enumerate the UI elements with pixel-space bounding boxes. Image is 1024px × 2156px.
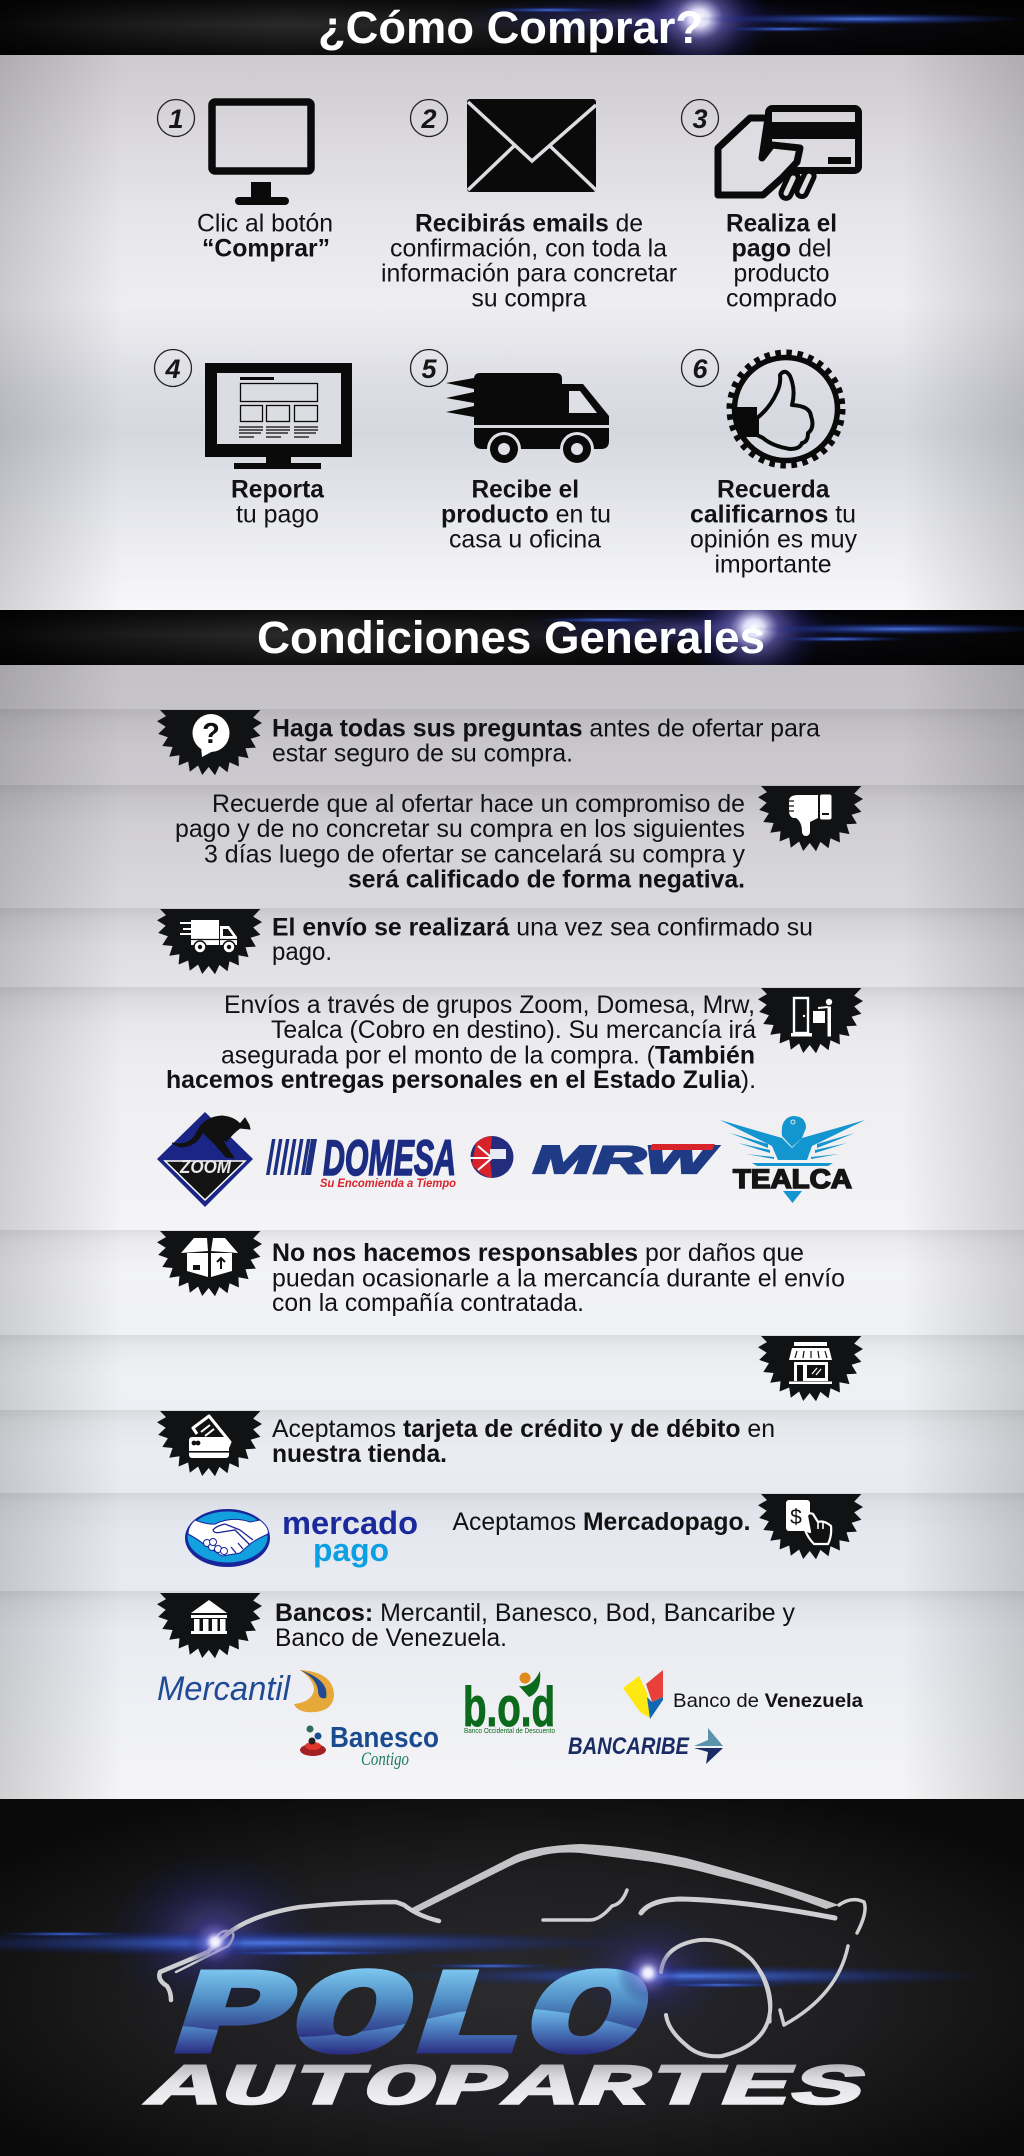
step text 5: producto en tu [441,500,611,528]
text: shipping: El envío se realizará una vez sea confirmado su [272,914,813,942]
text: banks: Bancos: Mercantil, Banesco, Bod, Bancaribe y [275,1599,795,1627]
condition: carriers [166,988,863,1094]
text: carriers: Envíos a través de grupos Zoom, Domesa, Mrw, [224,991,755,1019]
icon: truck badge [157,909,262,974]
condition: not responsible for damage [157,1231,845,1317]
step text 6: importante [714,550,832,578]
condition: credit and debit cards [157,1411,775,1476]
logo: Bancaribe: BANCARIBE [568,1733,690,1760]
step text 5: Recibe el [472,476,579,504]
panel: how to buy background [0,55,1024,610]
title: Condiciones Generales: Condiciones Generales [257,612,765,663]
text: cards accepted: Aceptamos tarjeta de crédito y de débito en [272,1415,775,1443]
icon: envelope [467,99,596,192]
step text 3: Realiza el [726,210,837,238]
header band: ¿Cómo Comprar? [0,0,1024,55]
step text 3: pago del [732,234,832,262]
condition: banks [157,1593,795,1658]
icon: door delivery badge [758,988,863,1053]
logo: Zoom: ZOOM [179,1157,232,1177]
icon: pay tap badge: $ [790,1506,802,1529]
text: shipping: pago. [272,938,332,966]
logo: Domesa [266,1130,456,1190]
icon: pay tap badge [758,1494,863,1559]
step 3: make the payment [682,100,860,312]
step 1: click the buy button [158,100,333,262]
logo: MRW [533,1139,719,1182]
wordmark: POLO: POLO [176,1952,646,2088]
logo: Banco de Venezuela [623,1670,863,1719]
text: carriers: asegurada por el monto de la compra. (También [221,1042,755,1070]
logo: Mercado Pago: pago [313,1532,389,1568]
footer: Polo Autopartes brand panel [0,1799,1024,2156]
wordmark: POLO [174,1968,648,2055]
panel: general conditions background [0,665,1024,1799]
logo: B.O.D: Banco Occidental de Descuento [464,1728,555,1735]
step 2: confirmation emails [381,99,677,312]
text: cards accepted [272,1415,775,1468]
text: damage disclaimer: con la compañía contratada. [272,1289,584,1317]
header band: Condiciones Generales [0,610,1024,665]
logo: Tealca: TEALCA [733,1164,852,1194]
step text 3: producto [734,260,830,288]
icon: box badge [157,1231,262,1296]
flare highlights [185,1912,680,2005]
text: Mercadopago accepted: Aceptamos Mercadopago. [452,1508,750,1536]
number badge 3 [682,100,718,136]
step text 3 [726,210,837,312]
number badge 2: 2 [420,104,437,134]
step text 2: información para concretar [381,260,677,288]
step text 6: opinión es muy [690,526,857,554]
logo: Domesa: Su Encomienda a Tiempo [320,1178,456,1190]
text: banks [275,1599,795,1652]
car outline [159,1844,865,2056]
logo: B.O.D [463,1671,555,1738]
step text 2 [381,210,677,312]
step text 1: Clic al botón [197,210,333,238]
icon: cards badge [157,1411,262,1476]
icon: computer monitor [212,102,311,205]
text: carriers [166,991,756,1094]
icon: thumbs up seal [730,352,842,466]
logo: Domesa: DOMESA [323,1130,456,1186]
logo: Bancaribe [568,1728,723,1764]
text: commitment warning: 3 días luego de ofertar se cancelará su compra y [204,840,745,868]
logo: round carrier seal [470,1136,514,1178]
text: ask questions: estar seguro de su compra. [272,740,573,768]
icon: monitor with web page [205,363,352,469]
step 5: receive the product [410,350,611,554]
logo: Mercado Pago [185,1505,418,1568]
step text 1 [197,210,333,262]
text: banks: Banco de Venezuela. [275,1624,507,1652]
number badge 6: 6 [692,354,708,384]
text: shipping [272,914,813,966]
wordmark: POLO: POLO [176,1952,646,2088]
condition: negative rating warning [175,786,863,894]
text: damage disclaimer: puedan ocasionarle a la mercancía durante el envío [272,1264,845,1292]
lens flares [0,1850,990,2035]
step text 5 [441,476,611,554]
step text 4: Reporta [231,476,325,504]
text: damage disclaimer: No nos hacemos responsables por daños que [272,1239,804,1267]
number badge 3: 3 [692,104,708,134]
text: commitment warning [175,790,745,894]
condition: Mercadopago [185,1494,863,1568]
number badge 1: 1 [168,104,184,134]
step text 1: “Comprar” [202,234,330,262]
step text 6: Recuerda [717,476,831,504]
text: ask questions [272,714,820,768]
text: cards accepted: nuestra tienda. [272,1440,447,1468]
condition: shipping after confirmation [157,909,813,974]
title: ¿Cómo Comprar?: ¿Cómo Comprar? [318,2,703,53]
text: damage disclaimer [272,1239,845,1317]
step text 4 [231,476,325,528]
wordmark: AUTOPARTES: AUTOPARTES [144,2057,864,2122]
icon: question bubble badge: ? [202,718,220,750]
text: carriers: Tealca (Cobro en destino). Su mercancía irá [271,1016,756,1044]
step text 4: tu pago [236,500,319,528]
step text 3: comprado [726,284,837,312]
step text 2: confirmación, con toda la [390,234,667,262]
number badge 1 [158,100,194,136]
number badge 5: 5 [421,354,437,384]
number badge 4 [154,350,192,386]
step text 6 [690,476,857,578]
step text 2: Recibirás emails de [415,210,643,238]
logo: B.O.D: b.o.d [463,1675,555,1738]
logo: Banesco: Banesco [330,1722,439,1754]
number badge 6 [682,350,718,386]
icon: question bubble badge [157,710,262,775]
step text 6: calificarnos tu [690,500,856,528]
step text 5: casa u oficina [449,526,601,554]
stripes [266,1139,317,1175]
icon: thumbs down badge [758,786,863,851]
text: commitment warning: pago y de no concretar su compra en los siguientes [175,815,745,843]
number badge 2 [410,100,448,136]
logo: Banesco: Contigo [361,1749,409,1770]
icon: hand holding card [718,108,860,200]
step 4: report your payment [154,350,352,528]
condition: ask questions [157,710,820,775]
logo: Mercantil: Mercantil [157,1670,291,1708]
step 6: rate us [682,350,857,578]
text: ask questions: Haga todas sus preguntas antes de ofertar para [272,714,820,742]
text: commitment warning: Recuerde que al ofertar hace un compromiso de [212,790,745,818]
number badge 4: 4 [164,354,181,384]
logo: Banesco [300,1722,439,1770]
text: carriers: hacemos entregas personales en el Estado Zulia). [166,1066,756,1094]
icon: store badge [758,1336,863,1401]
logo: Mercado Pago: mercado [282,1505,418,1541]
logo: Banco de Venezuela: Banco de Venezuela [673,1690,863,1712]
number badge 5 [410,350,448,386]
icon: delivery truck [446,373,609,466]
step text 2: su compra [472,284,587,312]
logo: MRW: MRW [533,1139,719,1182]
logo: Zoom [157,1112,253,1207]
logo: Tealca [720,1116,865,1203]
text: commitment warning: será calificado de forma negativa. [348,866,745,894]
icon: bank badge [157,1593,262,1658]
